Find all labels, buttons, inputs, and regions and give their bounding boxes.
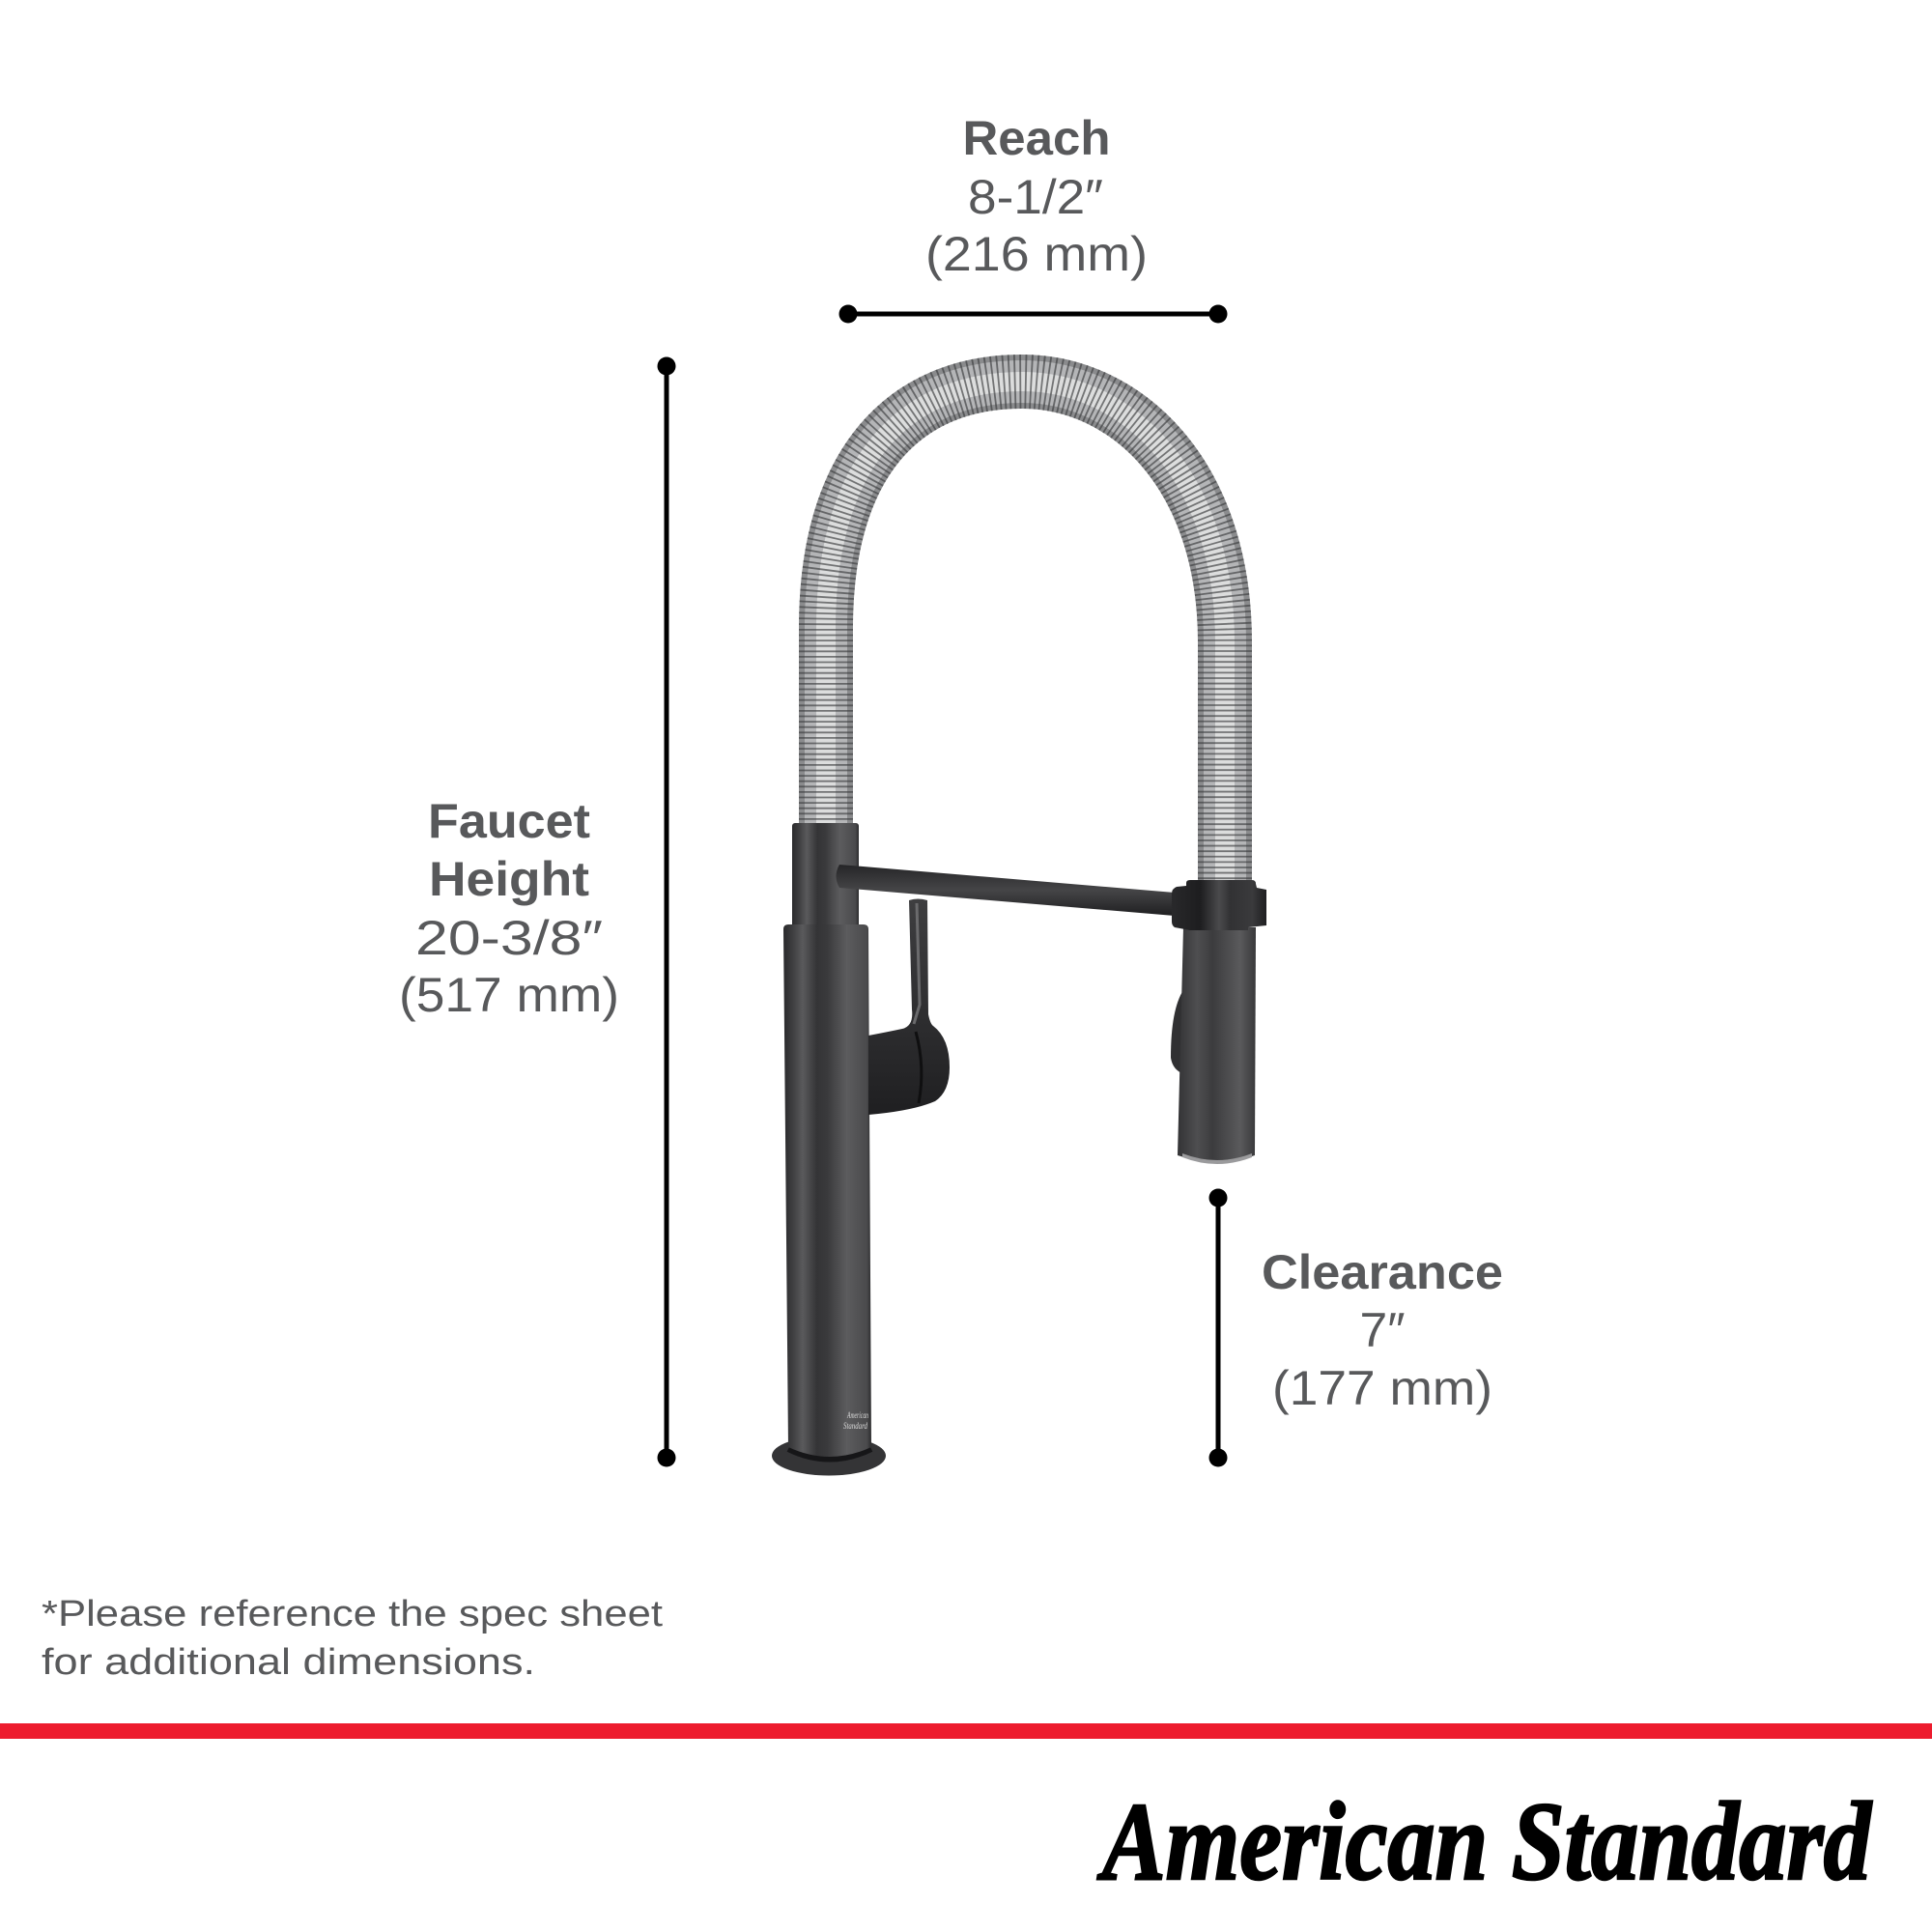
footnote: for additional dimensions.: [42, 1642, 535, 1683]
dimension label: faucet height: Height: [429, 852, 589, 906]
faucet illustration: [772, 382, 1266, 1476]
red divider bar: [0, 1723, 1932, 1739]
dimension label: clearance: [1262, 1245, 1503, 1415]
upper collar: [792, 823, 859, 927]
dimension line: faucet height: [657, 357, 676, 1466]
dimension label: reach: [925, 111, 1148, 281]
spray head: [1171, 927, 1256, 1164]
dimension label: reach: Reach: [962, 111, 1111, 165]
pivot rod: [837, 865, 1175, 916]
base logo mark: [843, 1410, 868, 1431]
dimension label: faucet height: [399, 794, 619, 1022]
hose clamp: [1172, 880, 1266, 930]
dimension line: clearance: [1209, 1188, 1227, 1466]
mixer handle: [868, 898, 950, 1115]
base logo mark: American: [846, 1410, 868, 1420]
footnote: [42, 1594, 664, 1683]
dimension label: reach: (216 mm): [925, 227, 1148, 281]
dimension label: faucet height: 20-3/8″: [415, 911, 603, 965]
dimension line: reach: [838, 305, 1227, 323]
dimension label: clearance: (177 mm): [1272, 1361, 1492, 1415]
dimension label: faucet height: Faucet: [428, 794, 590, 848]
flexible spring hose: [826, 382, 1225, 884]
dimension label: clearance: Clearance: [1262, 1245, 1503, 1299]
dimension label: clearance: 7″: [1360, 1303, 1405, 1357]
dimension label: faucet height: (517 mm): [399, 968, 619, 1022]
base logo mark: Standard: [843, 1421, 867, 1431]
base flange: [772, 1435, 886, 1476]
faucet body column: [783, 924, 871, 1457]
footnote: *Please reference the spec sheet: [42, 1594, 664, 1634]
dimension label: reach: 8-1/2″: [968, 170, 1103, 224]
